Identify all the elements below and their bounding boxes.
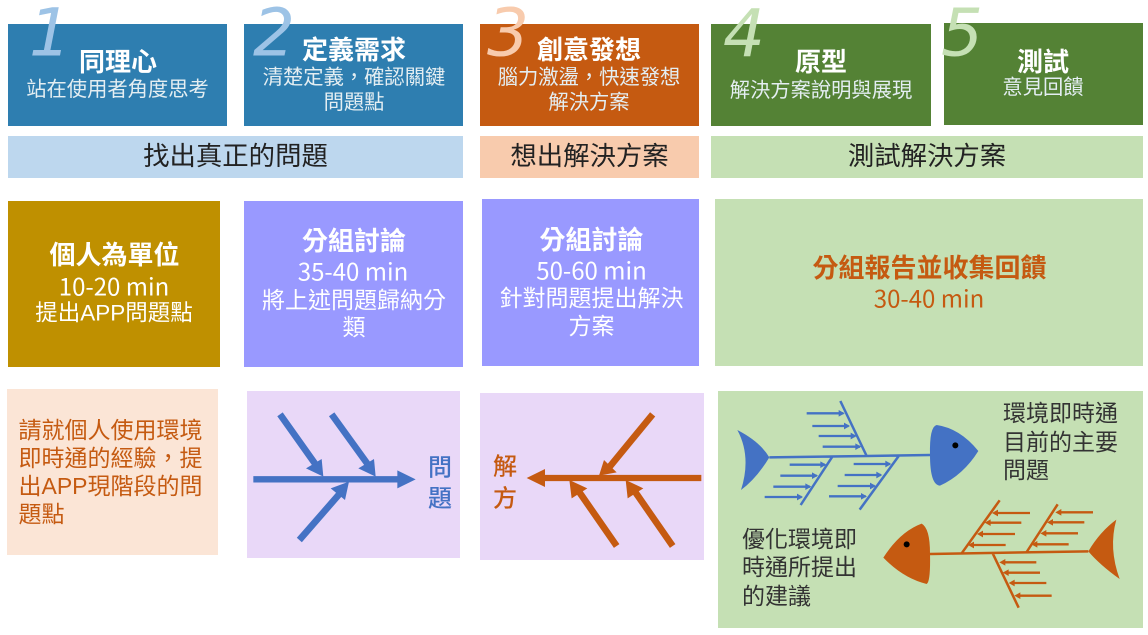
icon: blue fish xyxy=(737,401,978,510)
text: improvement suggestions: 優化環境即 xyxy=(742,526,857,552)
panel: group discussion 35-40 min: 類 xyxy=(342,314,366,340)
panel: group discussion 35-40 min xyxy=(244,201,463,367)
panel: group discussion 50-60 min: 方案 xyxy=(568,313,614,339)
panel: individual prompt: 即時通的經驗，提 xyxy=(18,445,202,471)
panel: fish diagrams xyxy=(718,391,1143,628)
step 3 description xyxy=(498,66,680,114)
panel: step 5 test xyxy=(941,0,1143,125)
text: improvement suggestions xyxy=(742,526,857,609)
label: solution xyxy=(493,446,517,514)
band: come up with solutions: 想出解決方案 xyxy=(510,141,669,171)
step 2 heading: 定義需求 xyxy=(302,35,406,65)
step 2 description: 問題點 xyxy=(324,91,384,114)
panel: step 3 ideate xyxy=(480,0,699,126)
band: find the real problem: 找出真正的問題 xyxy=(143,141,328,171)
fishbone arrows: ideas to solution xyxy=(527,414,701,546)
panel: individual prompt: 題點 xyxy=(18,501,64,527)
panel: individual work: 個人為單位 xyxy=(49,240,180,270)
text: current main problems: 環境即時通 xyxy=(1003,400,1118,426)
panel: group report: 分組報告並收集回饋 xyxy=(812,253,1047,283)
label: solution: 解 xyxy=(493,446,517,482)
step 2 description xyxy=(263,66,445,114)
label: problem: 問 xyxy=(428,448,452,482)
panel: individual prompt xyxy=(7,389,218,555)
step 3 heading: 創意發想 xyxy=(537,35,641,65)
panel: solution fishbone diagram xyxy=(480,393,704,560)
label: problem: 題 xyxy=(428,478,452,514)
text: current main problems: 問題 xyxy=(1003,457,1049,483)
panel: group report xyxy=(715,199,1143,366)
panel: group discussion 50-60 min: 50-60 min xyxy=(536,252,647,286)
step 5 heading: 測試 xyxy=(1017,47,1069,77)
step 1 heading: 同理心 xyxy=(79,47,157,77)
panel: individual work xyxy=(8,201,220,367)
label: solution: 方 xyxy=(493,478,517,514)
icon: orange fish xyxy=(883,500,1120,608)
step 5 description: 意見回饋 xyxy=(1002,76,1084,99)
panel: individual prompt: 出APP現階段的問 xyxy=(18,473,203,499)
panel: problem fishbone diagram xyxy=(247,391,460,558)
step 4 description: 解決方案說明與展現 xyxy=(730,79,912,102)
step 2 description: 清楚定義，確認關鍵 xyxy=(263,66,445,89)
step 4 heading: 原型 xyxy=(795,47,847,77)
text: current main problems xyxy=(1003,400,1118,483)
panel: group report: 30-40 min xyxy=(874,280,984,314)
fishbone arrows: causes to problem xyxy=(253,414,416,540)
panel: step 1 empathy xyxy=(8,0,227,126)
panel: group discussion 35-40 min: 分組討論 xyxy=(302,226,406,256)
panel: group discussion 50-60 min xyxy=(482,199,699,366)
panel: group discussion 35-40 min: 將上述問題歸納分 xyxy=(262,287,446,313)
panel: individual work: 10-20 min xyxy=(59,268,169,302)
band: test solutions: 測試解決方案 xyxy=(848,141,1006,171)
panel: group discussion 35-40 min: 35-40 min xyxy=(298,252,408,288)
step 1 description: 站在使用者角度思考 xyxy=(26,78,209,101)
band: come up with solutions xyxy=(480,136,699,178)
panel: group discussion 50-60 min: 分組討論 xyxy=(539,225,644,255)
step 3 description: 解決方案 xyxy=(548,91,630,114)
text: improvement suggestions: 的建議 xyxy=(742,583,811,609)
band: find the real problem xyxy=(8,136,463,178)
panel: step 4 prototype xyxy=(711,0,931,126)
panel: individual work: 提出APP問題點 xyxy=(35,300,193,326)
text: improvement suggestions: 時通所提出 xyxy=(742,554,857,580)
step 3 description: 腦力激盪，快速發想 xyxy=(498,66,680,89)
panel: group discussion 50-60 min: 針對問題提出解決 xyxy=(500,285,684,311)
band: test solutions xyxy=(711,136,1143,178)
panel: step 2 define xyxy=(244,0,463,126)
label: problem xyxy=(428,448,452,514)
text: current main problems: 目前的主要 xyxy=(1003,429,1118,455)
panel: individual prompt: 請就個人使用環境 xyxy=(18,417,202,443)
